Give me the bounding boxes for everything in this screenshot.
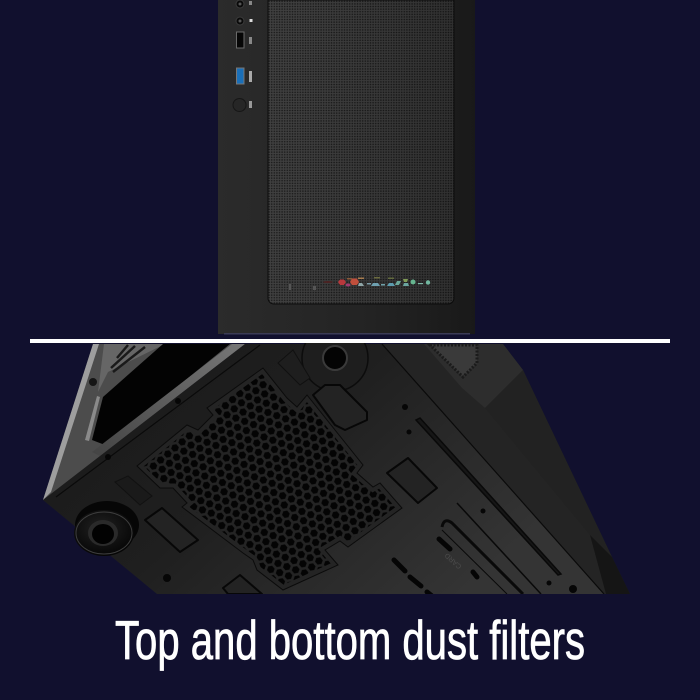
top image: front of PC case	[218, 0, 475, 334]
icon: USB 3.0 port	[236, 68, 252, 84]
side frame with open side	[43, 344, 245, 500]
slots and holes	[105, 398, 577, 593]
rubber foot: rear	[301, 343, 369, 390]
case markings: CARD	[444, 551, 463, 570]
icon: USB 2.0 port	[236, 32, 252, 48]
case front panel	[218, 0, 475, 334]
right side band	[383, 344, 606, 594]
icon: power button	[233, 98, 252, 112]
vent grille on side	[430, 345, 477, 377]
divider line	[30, 339, 670, 343]
short slots	[394, 539, 477, 596]
front mesh panel	[268, 0, 454, 304]
faint pad by front foot	[115, 476, 152, 505]
icon: audio jacks	[236, 0, 252, 25]
RGB lights through mesh	[289, 277, 430, 290]
faint pad by rear foot	[278, 350, 310, 385]
raised pads	[145, 385, 437, 594]
rubber foot: front left	[74, 501, 139, 556]
bottom image: underside of PC case	[43, 325, 630, 596]
hexagon-hole fan filter	[136, 368, 402, 590]
case bottom plate	[43, 344, 604, 594]
long slots	[416, 418, 561, 594]
plate edge lines	[56, 344, 604, 594]
